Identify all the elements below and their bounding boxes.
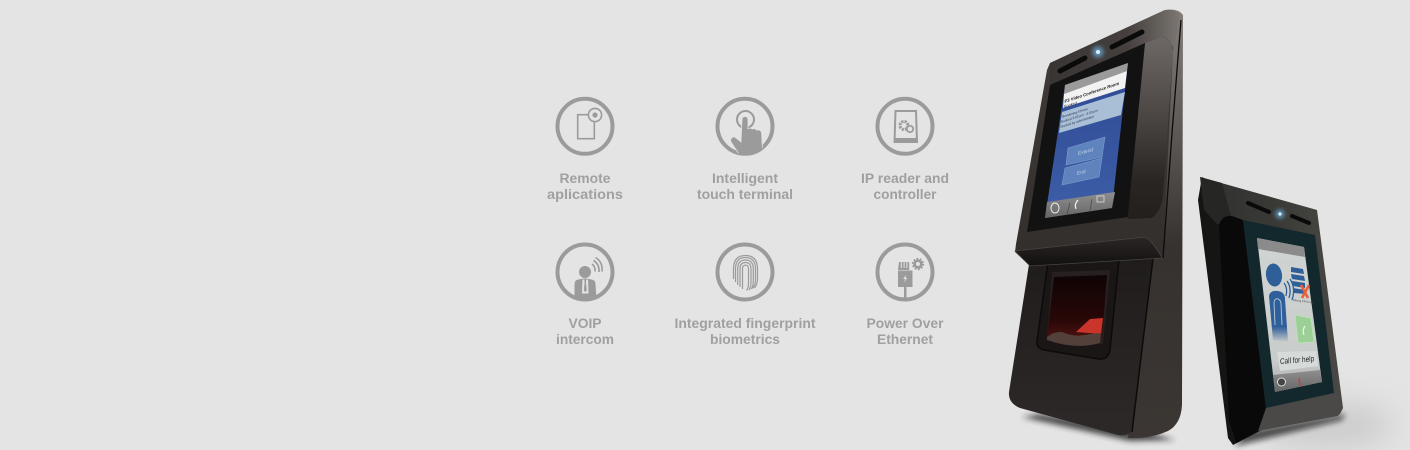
small access terminal <box>1198 177 1343 445</box>
large device shadow <box>1022 414 1175 441</box>
feature: integrated fingerprint biometrics: biometrics <box>710 332 780 347</box>
green call button <box>1295 315 1314 343</box>
feature: power over ethernet <box>866 244 944 347</box>
touch screen <box>1045 63 1128 218</box>
feature: intelligent touch terminal: touch terminal <box>697 187 793 202</box>
small touch screen <box>1257 238 1322 392</box>
status bar <box>1064 63 1128 94</box>
small bottom bar <box>1273 370 1322 392</box>
feature: VOIP intercom: VOIP <box>568 316 602 331</box>
speaker slots and LED <box>1060 32 1142 71</box>
side seam line <box>1163 20 1181 258</box>
small status bar <box>1257 238 1305 257</box>
info panel: Booked 3:00 pm - 4:00 pm <box>1061 108 1098 124</box>
feature: intelligent touch terminal: Intelligent <box>712 171 779 186</box>
terminal head <box>1015 10 1178 266</box>
call for help <box>1277 351 1318 371</box>
wrong pin label: Wrong PIN Code <box>1293 298 1314 305</box>
feature: power over ethernet: Ethernet <box>877 332 934 347</box>
person graphic <box>1264 262 1294 342</box>
head lower lip <box>1015 237 1162 266</box>
info panel: Booked by administrator <box>1060 114 1095 129</box>
error cross <box>1301 285 1309 298</box>
feature: IP reader and controller: controller <box>874 187 937 202</box>
feature: IP reader and controller <box>861 99 949 202</box>
black bezel <box>1027 43 1145 232</box>
feature icon grid <box>547 99 949 347</box>
small terminal rear <box>1198 177 1262 445</box>
feature: remote applications: aplications <box>547 187 623 202</box>
feature: VOIP intercom <box>556 244 614 347</box>
end button: End <box>1077 169 1086 177</box>
feature: integrated fingerprint biometrics <box>674 244 816 347</box>
terminal lower front <box>1009 256 1154 435</box>
room title: Booked <box>1064 100 1077 109</box>
small bottom band <box>1258 393 1343 431</box>
feature: remote applications: Remote <box>560 171 611 186</box>
small left corner strip <box>1200 177 1231 225</box>
extend button: Extend <box>1078 147 1093 157</box>
small speaker slots and LED <box>1248 203 1309 223</box>
terminal body side <box>1128 10 1183 438</box>
info panel: Remaining 47mins <box>1062 107 1088 119</box>
feature: power over ethernet: Power Over <box>866 316 944 331</box>
small device shadow <box>1255 403 1395 447</box>
extend button <box>1066 137 1105 165</box>
fingerprint sensor <box>1037 259 1119 359</box>
bottom button bar <box>1045 192 1115 218</box>
feature: integrated fingerprint biometrics: Integrated fingerprint <box>674 316 816 331</box>
end button <box>1062 158 1102 185</box>
feature: IP reader and controller: IP reader and <box>861 171 949 186</box>
small device under-shadow <box>1235 414 1345 446</box>
call for help: Call for help <box>1280 354 1314 366</box>
room title <box>1063 71 1127 109</box>
room title: P3 Video Conference Room <box>1064 81 1119 104</box>
info panel <box>1059 92 1125 133</box>
small black side panel <box>1219 216 1266 443</box>
keypad <box>1291 267 1306 294</box>
large access terminal <box>1009 10 1183 438</box>
front edge line <box>1132 258 1153 432</box>
small bezel <box>1243 220 1334 408</box>
small terminal front frame <box>1200 177 1343 431</box>
feature: VOIP intercom: intercom <box>556 332 614 347</box>
head right panel <box>1128 37 1173 219</box>
head top face <box>1050 10 1180 85</box>
feature: intelligent touch terminal <box>697 99 793 202</box>
feature: remote applications <box>547 99 623 202</box>
